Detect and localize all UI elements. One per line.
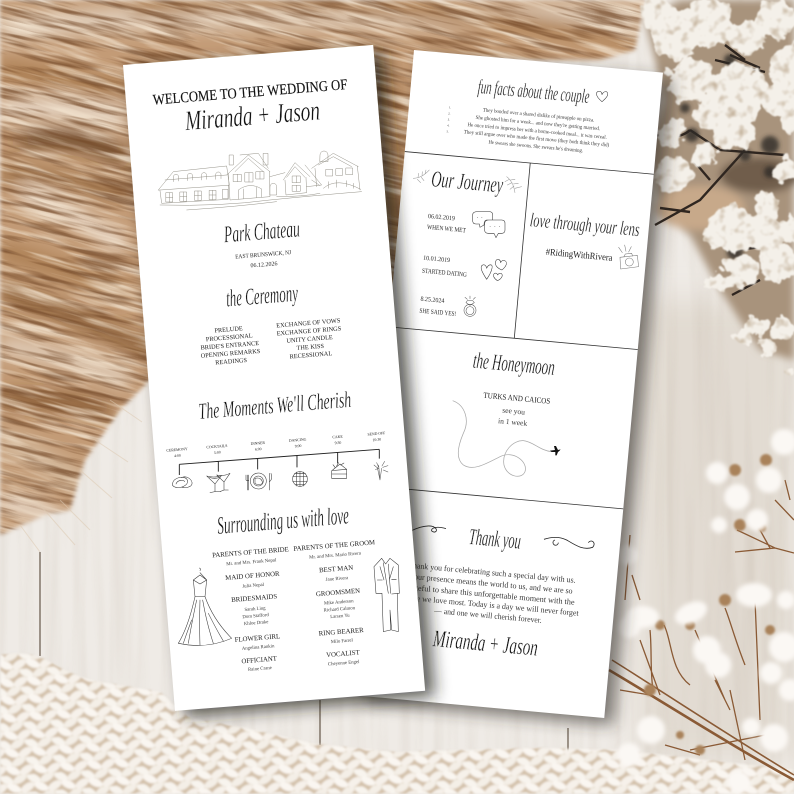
ceremony order right: RECESSIONAL bbox=[289, 350, 333, 361]
wedding party left: Mr. and Mrs. Frank Nepal bbox=[226, 558, 277, 567]
wedding party right: BEST MAN bbox=[319, 565, 353, 574]
background: cotton branches bottom right bbox=[609, 429, 794, 794]
journey date 3: SHE SAID YES! bbox=[419, 308, 457, 318]
wedding party left: MAID OF HONOR bbox=[225, 571, 280, 582]
icon: heart bbox=[596, 91, 608, 102]
icon: disco ball bbox=[293, 472, 307, 486]
ceremony order right: EXCHANGE OF VOWS bbox=[276, 317, 341, 330]
journey date 3 bbox=[419, 296, 458, 318]
fun facts list: 1. bbox=[449, 105, 451, 110]
fun facts list: 5. bbox=[446, 129, 449, 134]
background: pampas fur bbox=[0, 0, 646, 537]
signature: Miranda + Jason bbox=[431, 626, 539, 662]
fun facts list bbox=[446, 103, 612, 157]
venue name: Park Chateau bbox=[222, 216, 301, 248]
timeline labels bbox=[166, 431, 386, 459]
icon: plane bbox=[550, 446, 561, 455]
icon: camera bbox=[619, 245, 639, 269]
card sheet bbox=[123, 45, 425, 711]
card: program back (right) bbox=[355, 50, 672, 725]
timeline labels: 5:00 bbox=[214, 450, 221, 455]
ceremony order left: READINGS bbox=[215, 357, 248, 367]
timeline labels: CAKE bbox=[332, 435, 344, 439]
fun facts list: 2. bbox=[448, 111, 451, 116]
thank you message: grateful to share this unforgettable moment with the bbox=[405, 582, 575, 607]
heading: our journey: Our Journey bbox=[430, 166, 505, 198]
fun facts list: 4. bbox=[447, 123, 450, 128]
wedding party left: Raine Crane bbox=[248, 666, 272, 673]
title: WELCOME TO THE WEDDING OF bbox=[152, 77, 348, 109]
wedding party left: Sarah Ling bbox=[244, 606, 266, 613]
wedding party left: Julia Nepal bbox=[242, 583, 265, 590]
thank you message bbox=[398, 560, 583, 628]
background: cotton branches top right bbox=[641, 0, 794, 378]
wedding party right: VOCALIST bbox=[326, 649, 361, 659]
ceremony order right bbox=[276, 317, 344, 361]
journey date 3: 8.25.2024 bbox=[420, 296, 445, 305]
icon: rings bbox=[172, 477, 192, 488]
background: fur wisps bbox=[20, 400, 142, 552]
timeline labels: 9:30 bbox=[334, 441, 342, 445]
card icons bbox=[413, 91, 639, 316]
icon: engagement ring bbox=[464, 296, 476, 316]
wedding party right: Larsen Yu bbox=[330, 614, 350, 620]
fun facts list: 3. bbox=[448, 117, 450, 122]
destination: TURKS AND CAICOS bbox=[483, 391, 551, 406]
icon: dinner plate bbox=[246, 473, 272, 490]
card contents bbox=[138, 76, 404, 679]
timeline axis bbox=[179, 449, 379, 475]
timeline and icons bbox=[172, 449, 399, 645]
journey date 2: STARTED DATING bbox=[422, 268, 467, 279]
timeline labels: CEREMONY bbox=[166, 447, 188, 453]
wedding party left: FLOWER GIRL bbox=[234, 633, 280, 644]
wedding party left: OFFICIANT bbox=[241, 656, 278, 665]
flourish left bbox=[411, 526, 446, 532]
ceremony order left: PROCESSIONAL bbox=[206, 332, 253, 343]
wedding party left: Dom Stafford bbox=[242, 613, 270, 620]
fun facts list: He once tried to impress her with a home-cooked meal... it was cereal. bbox=[467, 122, 607, 141]
timeline labels: SEND OFF bbox=[367, 431, 385, 437]
wedding party left: BRIDESMAIDS bbox=[231, 593, 278, 604]
venue location: EAST BRUNSWICK, NJ bbox=[235, 250, 292, 261]
fun facts list: She ghosted him for a week... and now they're getting married. bbox=[475, 114, 600, 132]
thank you message: Your presence means the world to us, and we are so bbox=[409, 572, 573, 596]
fun facts list: He swears she swoons. She swears he's dreaming. bbox=[488, 140, 583, 154]
timeline labels: COCKTAILS bbox=[206, 444, 228, 450]
card shadow bbox=[133, 51, 435, 717]
card shadow bbox=[364, 57, 672, 725]
heading: honeymoon: the Honeymoon bbox=[472, 348, 556, 380]
ceremony order left: BRIDE'S ENTRANCE bbox=[200, 340, 260, 352]
see you: see you bbox=[502, 406, 526, 417]
illustration: wedding dress bbox=[178, 568, 232, 645]
heading: fun facts: fun facts about the couple bbox=[477, 76, 591, 108]
icon: cake slice bbox=[332, 463, 347, 478]
hashtag: #RidingWithRivera bbox=[545, 248, 614, 264]
wedding party right: Richard Calmon bbox=[323, 606, 356, 614]
card contents bbox=[360, 70, 661, 668]
timeline labels: 10:30 bbox=[372, 437, 381, 442]
flourish right bbox=[544, 537, 594, 548]
heading: thank you: Thank you bbox=[468, 524, 522, 554]
thank you message: — and one we will cherish forever. bbox=[433, 606, 542, 625]
ceremony order left: PRELUDE bbox=[214, 325, 243, 335]
wedding party right: Milo Farrel bbox=[331, 638, 354, 645]
ceremony order right: EXCHANGE OF RINGS bbox=[276, 325, 342, 338]
heading: surrounding us: Surrounding us with love bbox=[216, 502, 350, 540]
timeline labels: DINNER bbox=[250, 441, 266, 446]
icon: cocktails bbox=[207, 473, 230, 493]
illustration: groom suit bbox=[374, 558, 399, 632]
couple names: Miranda + Jason bbox=[183, 95, 321, 137]
ceremony order left bbox=[199, 324, 262, 368]
timeline labels: 6:00 bbox=[255, 447, 262, 452]
wedding party right: GROOMSMEN bbox=[316, 588, 360, 598]
wedding party left: Angelina Rankin bbox=[242, 644, 275, 652]
journey date 2 bbox=[422, 255, 469, 279]
ceremony order right: UNITY CANDLE bbox=[286, 334, 333, 345]
card: program front (left) bbox=[123, 45, 435, 717]
wedding party right: Mike Anderson bbox=[324, 599, 354, 607]
icon: leaf left bbox=[413, 170, 429, 183]
journey date 2: 10.01.2019 bbox=[423, 255, 450, 264]
wedding party right: Jane Rivera bbox=[326, 576, 349, 583]
fun facts list: They still argue over who made the first move (they both think they did) bbox=[463, 128, 610, 149]
thank you message: people we love most. Today is a day we will never forget bbox=[399, 592, 580, 618]
wedding party left: Khloe Drake bbox=[244, 620, 269, 627]
thank you message: Thank you for celebrating such a special day with us. bbox=[408, 561, 576, 585]
illustration: chateau bbox=[158, 151, 362, 210]
heading: ceremony: the Ceremony bbox=[225, 281, 299, 312]
timeline labels: 9:00 bbox=[295, 444, 302, 448]
journey date 1 bbox=[427, 213, 467, 234]
wedding party right: Mr. and Mrs. Mario Rivera bbox=[309, 551, 362, 561]
heading: love through your lens: love through your lens bbox=[529, 209, 641, 241]
journey date 1: 06.02.2019 bbox=[428, 213, 455, 222]
heading: moments: The Moments We'll Cherish bbox=[198, 387, 352, 424]
timeline labels: 4:00 bbox=[174, 454, 181, 458]
timeline labels: DANCING bbox=[289, 437, 307, 443]
wedding party right bbox=[293, 539, 385, 669]
icon: chat bubbles bbox=[473, 212, 505, 238]
card sheet bbox=[355, 50, 663, 718]
icon: bouquet bbox=[374, 461, 388, 480]
ceremony order right: THE KISS bbox=[296, 343, 325, 352]
dividers bbox=[374, 152, 654, 509]
date: 06.12.2026 bbox=[250, 261, 278, 269]
journey date 1: WHEN WE MET bbox=[427, 224, 466, 234]
background: knit blanket bbox=[0, 640, 794, 794]
fun facts list: They bonded over a shared dislike of pineapple on pizza. bbox=[483, 107, 595, 124]
icon: hearts bbox=[481, 259, 506, 281]
wedding party right: Cheyenne Engel bbox=[328, 660, 360, 667]
wedding party left: PARENTS OF THE BRIDE bbox=[212, 546, 289, 559]
ceremony order left: OPENING REMARKS bbox=[200, 348, 261, 360]
wedding party left bbox=[212, 546, 298, 675]
icon: leaf right bbox=[505, 177, 522, 193]
wedding party right: PARENTS OF THE GROOM bbox=[293, 539, 375, 553]
wedding party right: RING BEARER bbox=[318, 627, 364, 638]
flight path bbox=[453, 401, 552, 476]
in 1 week: in 1 week bbox=[498, 416, 528, 428]
